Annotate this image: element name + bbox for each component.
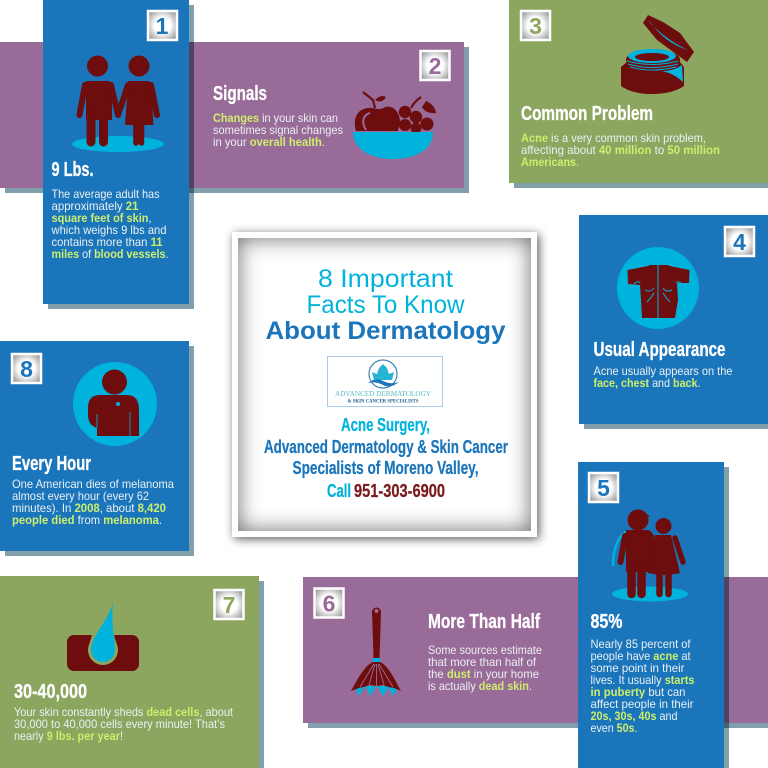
number badge 2: 2 — [429, 53, 441, 79]
icon: hair follicle — [67, 601, 139, 671]
signals text: in your overall health. — [213, 136, 325, 149]
contact text: Advanced Dermatology & Skin Cancer — [264, 437, 508, 457]
icon: person with mole — [73, 362, 157, 446]
9 lbs text — [51, 188, 168, 261]
more than half text: that more than half of — [428, 656, 537, 669]
panel 1: 9 lbs — [43, 0, 194, 309]
number badge 8 — [12, 354, 41, 383]
number badge 2 — [420, 51, 450, 80]
title: 8 Important — [318, 265, 453, 293]
number badge 1: 1 — [156, 13, 169, 39]
85 percent text: lives. It usually starts — [590, 674, 695, 687]
contact text — [264, 415, 508, 501]
dead cells text — [14, 706, 234, 743]
9 lbs text: miles of blood vessels. — [52, 248, 168, 261]
every hour text: One American dies of melanoma — [12, 478, 174, 491]
85 percent text: people have acne at — [590, 650, 691, 663]
signals text: Changes in your skin can — [213, 112, 338, 125]
85 percent text: Nearly 85 percent of — [590, 638, 691, 651]
heading: Signals: Signals — [213, 83, 267, 105]
title: Facts To Know — [306, 291, 465, 319]
signals text — [213, 112, 343, 149]
heading: Common Problem: Common Problem — [521, 103, 653, 125]
logo: Advanced Dermatology: & SKIN CANCER SPECIALISTS — [348, 400, 419, 404]
heading: More Than Half: More Than Half — [428, 611, 540, 633]
number badge 5: 5 — [597, 475, 610, 501]
title: About Dermatology — [266, 317, 506, 345]
85 percent text: some point in their — [590, 662, 685, 675]
number badge 6: 6 — [323, 590, 335, 616]
contact text: 951-303-6900 — [354, 481, 445, 501]
dead cells text: nearly 9 lbs. per year! — [14, 730, 123, 743]
every hour text: almost every hour (every 62 — [12, 490, 149, 503]
panel 4: usual appearance — [579, 215, 768, 429]
9 lbs text: approximately 21 — [52, 200, 139, 213]
icon: fruit bowl — [353, 92, 436, 159]
signals text: sometimes signal changes — [213, 124, 343, 137]
heading: Usual Appearance: Usual Appearance — [594, 339, 726, 361]
heading: 30-40,000: 30-40,000 — [14, 681, 87, 703]
panel 6: more than half — [303, 577, 768, 728]
dead cells text: Your skin constantly sheds dead cells, about — [14, 706, 234, 719]
85 percent text: affect people in their — [590, 698, 694, 711]
contact text: Acne Surgery, — [341, 415, 430, 435]
panel 8: every hour — [0, 341, 194, 556]
number badge 7: 7 — [223, 592, 235, 618]
85 percent text: 20s, 30s, 40s and — [590, 710, 678, 723]
icon: couple holding hands — [72, 56, 164, 152]
title — [266, 265, 506, 345]
more than half text: the dust in your home — [428, 668, 539, 681]
icon: cream jar — [621, 15, 694, 94]
number badge 3: 3 — [529, 13, 542, 39]
85 percent text: even 50s. — [590, 722, 638, 735]
85 percent text: in puberty but can — [590, 686, 686, 699]
9 lbs text: The average adult has — [52, 188, 160, 201]
logo: Advanced Dermatology — [328, 356, 442, 406]
panel 2: signals — [0, 42, 469, 193]
common problem text: affecting about 40 million to 50 million — [521, 144, 720, 157]
number badge 8: 8 — [20, 356, 33, 382]
logo: Advanced Dermatology: ADVANCED DERMATOLOGY — [335, 389, 432, 398]
every hour text: minutes). In 2008, about 8,420 — [12, 502, 166, 515]
more than half text: Some sources estimate — [428, 644, 542, 657]
every hour text — [12, 478, 174, 527]
icon: teen couple — [612, 510, 688, 602]
number badge 5 — [589, 473, 618, 502]
icon: back torso — [617, 247, 699, 329]
common problem text — [521, 132, 720, 169]
more than half text: is actually dead skin. — [428, 680, 532, 693]
number badge 7 — [214, 590, 244, 619]
panel 3: common problem — [509, 0, 768, 188]
usual appearance text: face, chest and back. — [594, 377, 700, 390]
usual appearance text: Acne usually appears on the — [594, 365, 732, 378]
every hour text: people died from melanoma. — [12, 514, 162, 527]
9 lbs text: square feet of skin, — [52, 212, 152, 225]
heading: 85%: 85% — [590, 611, 623, 633]
9 lbs text: which weighs 9 lbs and — [51, 224, 166, 237]
center frame — [232, 232, 537, 537]
contact text: Specialists of Moreno Valley, — [292, 458, 478, 478]
number badge 1 — [148, 11, 177, 40]
common problem text: Americans. — [521, 156, 579, 169]
85 percent text — [590, 638, 695, 735]
icon: feather duster — [351, 608, 401, 696]
number badge 6 — [314, 588, 344, 618]
heading: Every Hour: Every Hour — [12, 453, 91, 475]
heading: 9 Lbs.: 9 Lbs. — [52, 159, 94, 181]
number badge 4 — [725, 227, 754, 256]
number badge 4: 4 — [733, 229, 746, 255]
9 lbs text: contains more than 11 — [52, 236, 163, 249]
panel 7: dead cells — [0, 576, 264, 768]
dead cells text: 30,000 to 40,000 cells every minute! That’s — [14, 718, 225, 731]
panel 5: 85 percent — [578, 462, 729, 768]
common problem text: Acne is a very common skin problem, — [521, 132, 706, 145]
contact text: Call — [327, 481, 351, 501]
more than half text — [428, 644, 542, 693]
number badge 3 — [521, 11, 550, 40]
usual appearance text — [594, 365, 732, 390]
